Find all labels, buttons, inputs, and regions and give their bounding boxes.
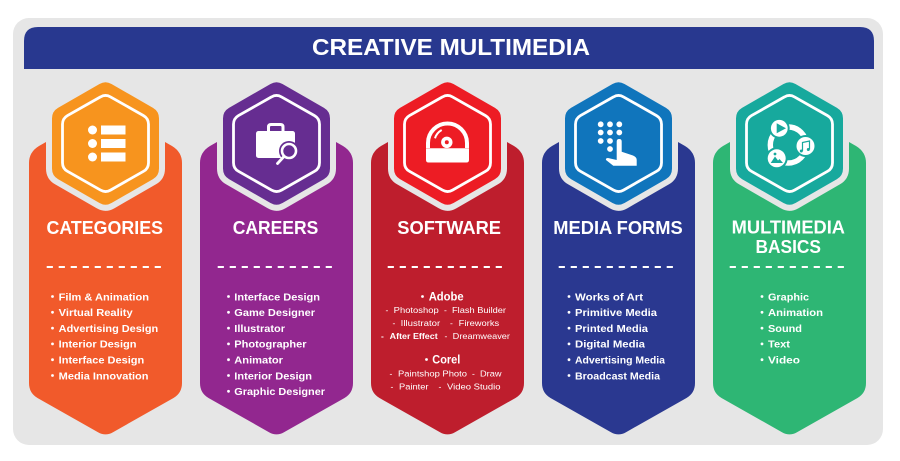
list: software: - [386,305,388,315]
list: careers [227,291,325,398]
list: software: - [381,331,384,341]
panel: careers [200,82,353,434]
list: categories: Media Innovation [59,370,149,382]
list: software: Paintshop Photo [398,368,467,378]
panel body: media forms [542,142,695,434]
list: categories: Film & Animation [59,291,149,303]
list: media forms: Digital Media [575,339,645,351]
panel: software [371,82,524,434]
list: categories: Interface Design [59,354,144,366]
heading: careers: CAREERS [233,218,318,238]
list: software: Video Studio [447,382,501,392]
list: software: Photoshop [394,305,439,315]
list: multimedia basics: Video [768,354,800,366]
heading: multimedia basics [732,218,845,257]
list: software: Draw [480,368,502,378]
heading: media forms: MEDIA FORMS [553,218,683,238]
list: media forms: Advertising Media [575,354,665,366]
list: media forms: Printed Media [575,323,648,335]
list: software: - [392,318,396,328]
panel body: multimedia basics [713,142,866,434]
list: software: Dreamweaver [453,331,510,341]
icon: keypad and finger [598,121,637,166]
panel: multimedia basics [713,82,866,434]
list: software: After Effect [390,331,438,341]
hexagon badge: multimedia basics [736,82,843,205]
list: categories [51,291,158,382]
list: media forms [568,291,665,382]
list: media forms: Broadcast Media [575,370,660,382]
hexagon badge: media forms [565,82,672,205]
list: software: - [438,382,442,392]
heading: multimedia basics: BASICS [756,237,821,257]
list: media forms: Primitive Media [575,307,657,319]
list: software: - [472,368,475,378]
heading: software: SOFTWARE [397,218,501,238]
list: careers: Graphic Designer [234,386,325,398]
list: multimedia basics: Animation [768,307,823,319]
panel body: careers [200,142,353,434]
list: software: Adobe [429,292,464,304]
panel: categories [29,82,182,434]
list: multimedia basics: Graphic [768,291,809,303]
list: media forms: Works of Art [575,291,644,303]
list: software: - [450,318,453,328]
list: careers: Interface Design [234,291,320,303]
list: software: Illustrator [401,318,440,328]
list: software: - [390,382,394,392]
icon: disc drive [426,124,469,162]
hexagon badge: careers [223,82,330,205]
list: careers: Game Designer [234,307,315,319]
icon: media cycle [766,118,816,169]
list: categories: Interior Design [59,339,137,351]
list: careers: Interior Design [234,370,312,382]
list: software: - [444,331,448,341]
title: CREATIVE MULTIMEDIA [312,34,590,60]
list: careers: Photographer [234,339,306,351]
list: multimedia basics [761,291,823,366]
list: software: - [390,368,392,378]
list: careers: Illustrator [234,323,285,335]
heading: categories: CATEGORIES [46,218,163,238]
list: software: Corel [432,354,460,366]
list: software: Painter [399,382,429,392]
hexagon badge: categories [52,82,159,205]
heading: multimedia basics: MULTIMEDIA [732,218,845,238]
list: categories: Advertising Design [59,323,158,335]
panel body: software [371,142,524,434]
list: software: Flash Builder [452,305,506,315]
hexagon badge: software [394,82,501,205]
list: multimedia basics: Sound [768,323,802,335]
header banner [24,27,874,69]
list: multimedia basics: Text [768,339,791,351]
icon: briefcase with magnifier [256,124,299,164]
list: categories: Virtual Reality [59,307,133,319]
list: software: Fireworks [459,318,499,328]
list: software [381,292,510,392]
panel body: categories [29,142,182,434]
icon: list [88,126,126,162]
panel: media forms [542,82,695,434]
list: software: - [444,305,447,315]
list: careers: Animator [234,354,283,366]
